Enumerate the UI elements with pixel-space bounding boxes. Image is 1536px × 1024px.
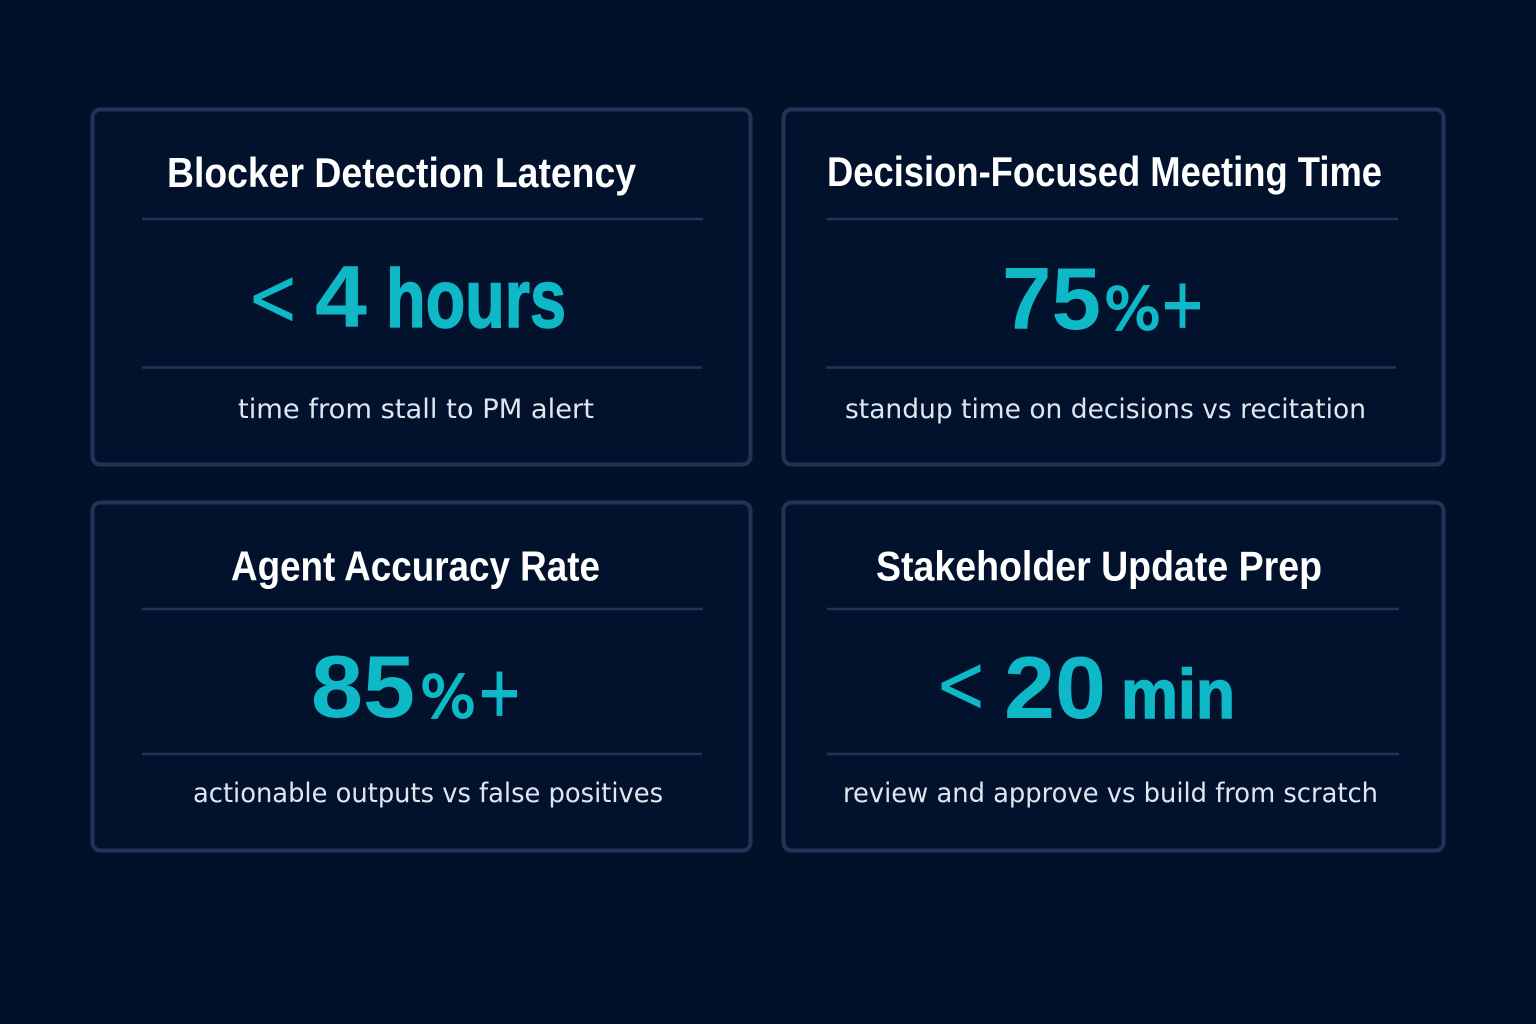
value: 75 percent plus: % — [1104, 275, 1161, 343]
value: under 20 min: < — [935, 637, 987, 732]
caption: standup time on decisions vs recitation: standup time on decisions vs recitation — [845, 394, 1366, 425]
panel: stakeholder update prep — [784, 502, 1444, 850]
value: 75 percent plus: 75 — [1002, 249, 1101, 348]
value: under 4 hours — [247, 247, 566, 346]
heading: blocker detection latency: Blocker Detection Latency — [167, 149, 637, 196]
panel: agent accuracy rate — [92, 502, 750, 850]
panel: blocker detection latency — [92, 110, 750, 464]
value: under 4 hours: hours — [386, 252, 566, 345]
value: 85 percent plus: + — [477, 653, 522, 732]
value: under 4 hours: 4 — [315, 247, 367, 346]
value: 85 percent plus — [311, 637, 522, 736]
heading: stakeholder update prep: Stakeholder Update Prep — [876, 542, 1322, 590]
value: under 20 min: 20 — [1004, 638, 1106, 737]
caption: review and approve vs build from scratch: review and approve vs build from scratch — [843, 778, 1378, 809]
heading: agent accuracy rate: Agent Accuracy Rate — [231, 542, 600, 590]
value: under 4 hours: < — [247, 250, 299, 345]
value: under 20 min: min — [1121, 655, 1235, 733]
heading: decision-focused meeting time: Decision-Focused Meeting Time — [827, 148, 1382, 195]
value: 85 percent plus: % — [420, 663, 476, 731]
panel: decision-focused meeting time — [784, 110, 1444, 464]
caption: time from stall to PM alert: time from stall to PM alert — [238, 394, 594, 425]
value: 75 percent plus — [1002, 249, 1205, 348]
caption: actionable outputs vs false positives: actionable outputs vs false positives — [193, 778, 663, 809]
value: 85 percent plus: 85 — [311, 637, 415, 736]
value: 75 percent plus: + — [1160, 265, 1205, 344]
value: under 20 min — [935, 637, 1235, 737]
